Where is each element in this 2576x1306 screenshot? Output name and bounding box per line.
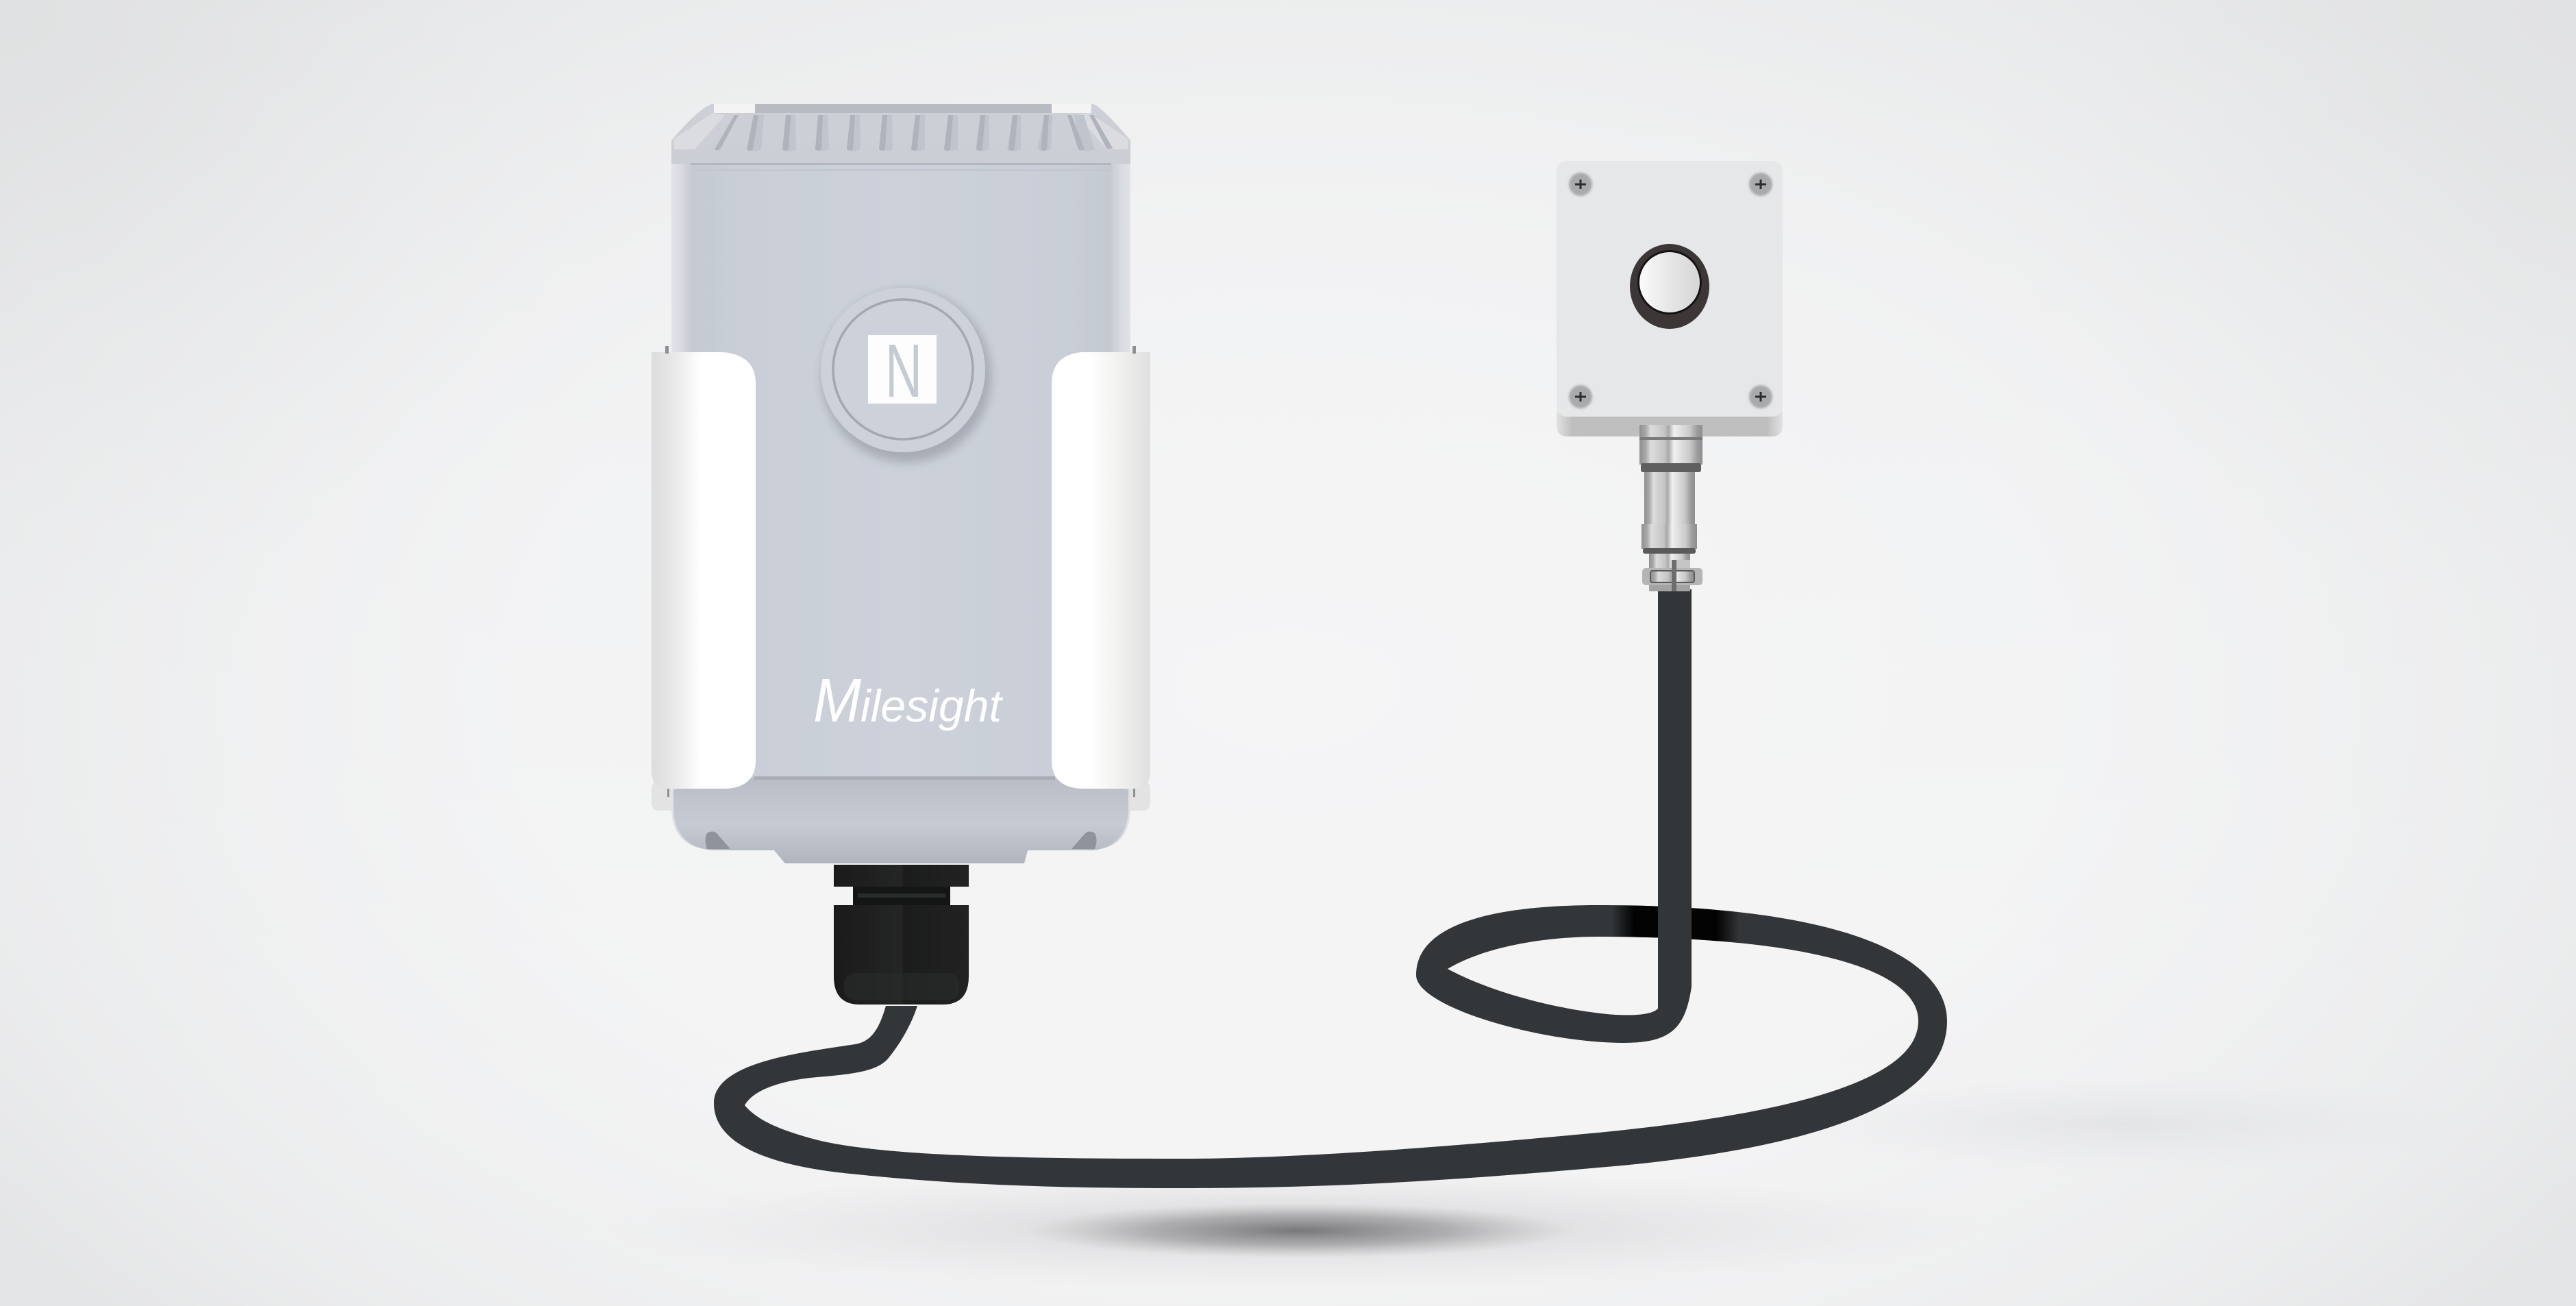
light sensor lens [1630,244,1709,329]
top cap with ribs [671,104,1130,171]
sensor mounting plate [1557,161,1783,436]
floor shadow [610,1166,1980,1290]
clip tabs behind device [652,781,1150,811]
NFC icon: N [885,329,922,413]
sensor connector [1639,425,1702,591]
clip pins [665,346,1136,797]
cable [714,589,1947,1188]
right mounting clip [1052,352,1150,789]
device body [671,104,1130,863]
screws [1569,173,1772,408]
brand logo: ilesight [860,680,1004,731]
left mounting clip [652,352,756,789]
brand logo: M [813,667,861,735]
cable gland [834,865,969,1005]
lower base band [673,778,1128,863]
NFC button [821,288,991,463]
